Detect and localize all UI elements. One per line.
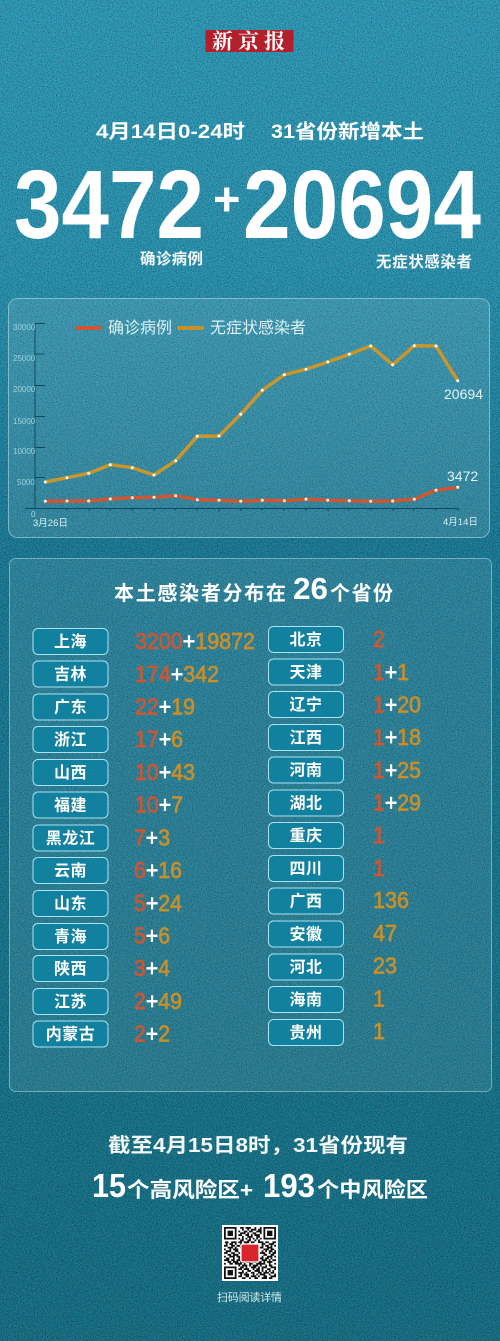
- x axis end label: 4月14日: [443, 517, 478, 528]
- row: 山东: 5+24: [134, 890, 182, 916]
- panel heading: 本土感染者分布在: [114, 582, 286, 605]
- row: 陕西: 3+4: [134, 955, 170, 981]
- row: 黑龙江: [33, 824, 170, 851]
- row: 陕西: [33, 955, 170, 982]
- legend: 无症状感染者: [210, 319, 306, 337]
- y axis labels: 5000: [17, 478, 35, 487]
- series: confirmed: [44, 486, 459, 503]
- row: 广西: [268, 887, 409, 914]
- heading: date and scope: [96, 121, 424, 143]
- panel: trend line chart: [8, 298, 490, 538]
- chart axes: [25, 324, 458, 511]
- row: 湖北: 1+29: [373, 790, 421, 816]
- row: 河南: 河南: [289, 762, 323, 780]
- row: 海南: [268, 986, 385, 1012]
- row: 江西: 1+18: [373, 724, 421, 750]
- summary line two: 个高风险区+: [127, 1178, 253, 1202]
- row: 安徽: [268, 920, 397, 947]
- summary line two: 193: [263, 1167, 315, 1204]
- row: 陕西: 陕西: [54, 960, 87, 978]
- row: 福建: 10+7: [135, 792, 183, 818]
- row: 广东: [33, 694, 195, 720]
- row: 云南: 云南: [54, 862, 87, 880]
- row: 上海: 3200+19872: [135, 628, 255, 654]
- panel heading: [114, 571, 393, 606]
- row: 云南: [33, 857, 182, 884]
- legend: 确诊病例: [108, 319, 172, 337]
- row: 吉林: 吉林: [54, 666, 87, 684]
- row: 四川: 1: [373, 855, 385, 881]
- right column rows: [268, 626, 421, 1046]
- row: 天津: 天津: [289, 664, 323, 682]
- row: 浙江: 17+6: [135, 726, 183, 752]
- row: 辽宁: [268, 692, 421, 718]
- row: 海南: 1: [373, 986, 385, 1012]
- y axis labels: 25000: [13, 354, 36, 363]
- row: 河南: [268, 757, 421, 783]
- row: 安徽: 47: [373, 920, 397, 946]
- row: 江苏: 2+49: [134, 988, 182, 1014]
- row: 河北: 23: [373, 952, 397, 978]
- panel heading: 个省份: [330, 582, 393, 605]
- row: 内蒙古: 2+2: [134, 1020, 170, 1046]
- y axis labels: 10000: [13, 447, 36, 456]
- logo: 新京报: 新京报: [212, 30, 290, 54]
- row: 广西: 广西: [289, 892, 323, 910]
- row: 贵州: 贵州: [289, 1024, 323, 1042]
- row: 江苏: 江苏: [54, 992, 87, 1011]
- row: 北京: 2: [373, 626, 385, 652]
- panel heading: 26: [293, 571, 328, 606]
- summary line two: [92, 1167, 428, 1204]
- row: 上海: 上海: [54, 633, 87, 651]
- row: 广东: 22+19: [135, 694, 195, 720]
- row: 青海: 青海: [54, 928, 87, 946]
- row: 天津: [268, 659, 409, 685]
- row: 山东: 山东: [54, 894, 87, 913]
- summary line one: 截至4月15日8时，31省份现有: [108, 1134, 408, 1157]
- row: 山西: 10+43: [135, 759, 195, 785]
- plus sign: +: [213, 172, 240, 225]
- headline figures: [14, 150, 481, 271]
- label: confirmed: 确诊病例: [140, 249, 203, 268]
- x axis start label: 3月26日: [33, 518, 68, 529]
- row: 吉林: 174+342: [135, 661, 219, 687]
- row: 青海: [33, 922, 170, 950]
- row: 内蒙古: 内蒙古: [46, 1024, 95, 1044]
- row: 江西: [268, 724, 421, 750]
- heading: date and scope: 31省份新增本土: [271, 121, 424, 143]
- row: 重庆: 1: [373, 822, 385, 848]
- heading: date and scope: 4月14日0-24时: [96, 121, 245, 143]
- row: 湖北: [268, 790, 421, 816]
- row: 广东: 广东: [54, 698, 87, 716]
- row: 辽宁: 辽宁: [289, 695, 323, 714]
- icon: QR code: [222, 1225, 278, 1281]
- row: 山西: 山西: [54, 764, 87, 782]
- row: 四川: 四川: [289, 861, 323, 878]
- row: 山西: [33, 759, 195, 786]
- row: 河南: 1+25: [373, 757, 421, 783]
- row: 贵州: [268, 1018, 385, 1046]
- row: 重庆: 重庆: [289, 826, 323, 845]
- row: 河北: 河北: [289, 958, 323, 976]
- row: 天津: 1+1: [373, 659, 409, 685]
- end value: confirmed: 3472: [447, 468, 478, 484]
- summary line two: 个中风险区: [317, 1178, 428, 1202]
- row: 浙江: [33, 726, 183, 752]
- row: 浙江: 浙江: [54, 731, 87, 749]
- row: 山东: [33, 890, 182, 916]
- row: 上海: [33, 628, 255, 654]
- row: 云南: 6+16: [134, 857, 182, 883]
- caption: scan to read: 扫码阅读详情: [217, 1290, 282, 1304]
- y axis labels: 15000: [13, 417, 36, 426]
- row: 吉林: [33, 661, 219, 687]
- row: 重庆: [268, 822, 385, 848]
- row: 北京: [268, 626, 385, 652]
- row: 福建: 福建: [54, 796, 87, 814]
- legend: [77, 319, 306, 337]
- footer summary: [92, 1134, 428, 1204]
- summary line two: 15: [92, 1167, 126, 1204]
- row: 海南: 海南: [289, 991, 323, 1009]
- row: 福建: [33, 792, 183, 818]
- row: 贵州: 1: [373, 1018, 385, 1044]
- y axis labels: 20000: [13, 385, 36, 394]
- row: 内蒙古: [33, 1020, 170, 1047]
- row: 北京: 北京: [289, 630, 323, 649]
- y axis labels: [13, 323, 36, 519]
- row: 青海: 5+6: [134, 922, 170, 948]
- row: 河北: [268, 952, 397, 980]
- panel: province distribution: [10, 558, 492, 1092]
- row: 黑龙江: 7+3: [134, 824, 170, 850]
- row: 四川: [268, 855, 385, 882]
- series: asymptomatic: [44, 344, 459, 484]
- row: 黑龙江: 黑龙江: [46, 830, 95, 848]
- row: 江西: 江西: [289, 729, 323, 747]
- row: 湖北: 湖北: [289, 794, 323, 812]
- end value: asymptomatic: 20694: [444, 386, 483, 402]
- row: 广西: 136: [373, 887, 409, 913]
- confirmed count: 3472: [14, 150, 204, 259]
- row: 江苏: [33, 988, 182, 1014]
- y axis labels: 30000: [13, 323, 36, 332]
- row: 安徽: 安徽: [289, 926, 323, 944]
- label: asymptomatic: 无症状感染者: [376, 252, 472, 271]
- y axis labels: 0: [31, 510, 36, 519]
- left column rows: [33, 628, 255, 1047]
- row: 辽宁: 1+20: [373, 692, 421, 718]
